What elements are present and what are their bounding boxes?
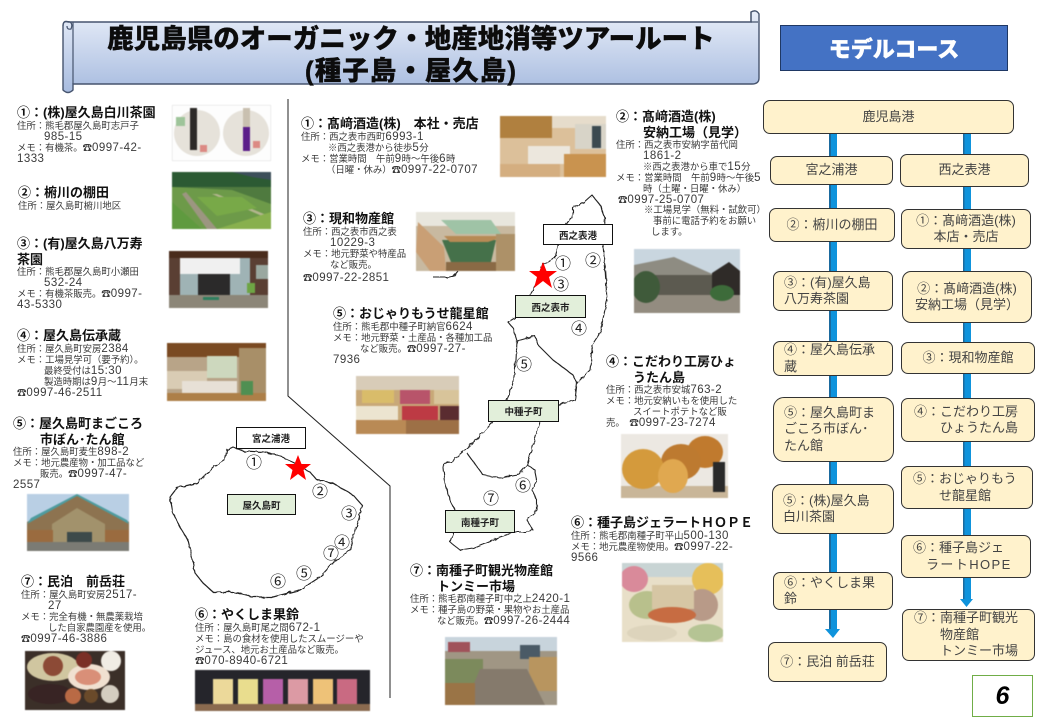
spot: やくしま果鈴: ☎070-8940-6721 <box>195 655 288 667</box>
step: トンミー市場: ⑦：南種子町観光 <box>914 610 1018 625</box>
spot: 種子島ジェラートHOPE: 住所：熊毛郡南種子町平山500-130 <box>571 530 729 542</box>
step: やくしま果鈴 <box>773 572 893 610</box>
map labels: Tanegashima: ① <box>555 250 571 274</box>
photo: tea packages <box>172 104 272 162</box>
photo: sweet potato pastries <box>620 434 728 498</box>
step: 白川茶園: ⑤：(株)屋久島 <box>783 492 870 508</box>
spot: 現和物産館: ③：現和物産館 <box>303 211 394 226</box>
spot: 種子島ジェラートHOPE <box>571 515 753 564</box>
spot: 椨川の棚田: ②：椨川の棚田 <box>18 185 109 200</box>
map labels: Yakushima: ⑤ <box>296 560 312 584</box>
step: まごころ市: ⑤：屋久島町ま <box>784 405 875 420</box>
map labels: Yakushima: ① <box>246 449 262 473</box>
step: 髙﨑酒造 安納工場: ②：髙﨑酒造(株) <box>917 280 1017 296</box>
course right column <box>900 154 1035 661</box>
spot: こだわり工房ひょうたん島 <box>606 354 737 429</box>
map labels: Tanegashima: 西之表港 <box>559 230 597 242</box>
step: ジェラートHOPE <box>901 535 1031 578</box>
step: 八万寿茶園: 八万寿茶園 <box>784 291 849 306</box>
spot: 屋久島白川茶園: 985-15 <box>44 131 83 143</box>
map labels: Tanegashima: ⑦ <box>483 485 499 509</box>
photo: terraced fields <box>171 171 272 230</box>
spot: 髙﨑酒造 安納工場: 1861-2 <box>643 150 682 162</box>
photo: gelato poster <box>621 562 724 643</box>
spot: 屋久島八万寿茶園: 532-24 <box>44 277 83 289</box>
title banner scroll <box>62 10 760 94</box>
step: 白川茶園: 白川茶園 <box>783 509 835 524</box>
course start: 鹿児島港: 鹿児島港 <box>862 109 914 124</box>
spot: こだわり工房ひょうたん島: うたん島 <box>633 370 685 385</box>
step: 屋久島伝承蔵: ④：屋久島伝承 <box>784 342 875 357</box>
map labels: Tanegashima <box>445 224 613 533</box>
spot: やくしま果鈴: メモ：島の食材を使用したスムージーや <box>195 633 364 644</box>
spot: 髙﨑酒造 本社・売店: ※西之表港から徒歩5分 <box>328 142 429 154</box>
map labels: Yakushima: ② <box>312 478 328 502</box>
step: 民泊 前岳荘: ⑦：民泊 前岳荘 <box>780 654 875 669</box>
spot: 民泊 前岳荘: ⑦：民泊 前岳荘 <box>21 574 125 589</box>
spot: まごころ市ぼん・たん館: メモ：地元農産物・加工品など 2557 <box>13 457 144 491</box>
step: 髙﨑酒造 本店 <box>901 209 1031 249</box>
step: 屋久島伝承蔵: 蔵 <box>784 358 797 374</box>
spot: まごころ市ぼん・たん館 <box>13 416 144 491</box>
map labels: Tanegashima: ⑤ <box>516 351 532 375</box>
spot: 髙﨑酒造 安納工場: します。 <box>651 226 688 237</box>
spot: 髙﨑酒造 本社・売店: ①：髙﨑酒造(株) 本社・売店 <box>301 116 479 131</box>
page number: 6 <box>996 682 1009 710</box>
spot: まごころ市ぼん・たん館: 住所：屋久島町麦生898-2 <box>13 446 129 458</box>
map labels: Tanegashima: ② <box>585 247 601 271</box>
photo: souvenir shelves <box>355 376 460 435</box>
title banner scroll: (種子島・屋久島) <box>305 56 517 86</box>
photo: market interior <box>444 636 558 706</box>
photo: food plates <box>24 650 126 711</box>
step: 髙﨑酒造 安納工場: 安納工場（見学） <box>915 297 1019 312</box>
step: 屋久島伝承蔵 <box>773 341 893 376</box>
step: 西之表港 <box>900 154 1029 187</box>
spot: やくしま果鈴: 住所：屋久島町尾之間672-1 <box>195 622 320 634</box>
photo: smoothies <box>194 669 371 712</box>
spot: 屋久島伝承蔵: メモ：工場見学可（要予約）。 ☎0997-46-2511 <box>17 354 144 399</box>
spot: やくしま果鈴: ⑥：やくしま果鈴 <box>195 607 299 622</box>
step: まごころ市: たん館 <box>784 438 823 453</box>
spot: 屋久島八万寿茶園: ③：(有)屋久島八万寿 <box>17 236 143 251</box>
photo: brewery shop interior <box>166 342 267 402</box>
spot: 現和物産館: ☎0997-22-2851 <box>303 272 389 284</box>
photo: produce shop <box>415 212 516 272</box>
map labels: Yakushima: ③ <box>341 500 357 524</box>
spot: 髙﨑酒造 安納工場: ※工場見学（無料・試飲可） <box>644 204 766 215</box>
model course heading <box>780 25 1008 71</box>
spot: 屋久島伝承蔵: 最終受付は15:30 <box>44 365 122 377</box>
icon: red star Tanegashima <box>529 262 557 288</box>
step: 現和物産館 <box>901 342 1035 374</box>
spot: トンミー市場: メモ：種子島の野菜・果物やお土産品 <box>410 604 569 615</box>
step: 椨川の棚田 <box>769 208 895 242</box>
spot: 髙﨑酒造 安納工場 <box>616 109 766 237</box>
spot: トンミー市場: など販売。☎0997-26-2444 <box>437 615 570 627</box>
step: 宮之浦港: 宮之浦港 <box>805 162 858 177</box>
spot: やくしま果鈴 <box>195 607 364 667</box>
spot: 髙﨑酒造 本社・売店: （日曜・休み）☎0997-22-0707 <box>326 164 478 176</box>
spot: 現和物産館: など販売。 <box>330 259 377 270</box>
spot: まごころ市ぼん・たん館: 販売。☎0997-47- <box>40 468 127 480</box>
spot: 屋久島白川茶園 <box>17 105 156 165</box>
step: 髙﨑酒造 安納工場 <box>902 271 1032 323</box>
spot: 髙﨑酒造 本社・売店 <box>301 116 479 176</box>
spot: おじゃりもうせ龍星館: メモ：地元野菜・土産品・各種加工品 7936 <box>333 332 492 366</box>
map labels: Yakushima: ④ <box>334 529 350 553</box>
map labels: Tanegashima: 中種子町 <box>504 407 542 418</box>
flow connectors and arrows <box>825 134 973 638</box>
step: まごころ市 <box>773 397 894 462</box>
spot: こだわり工房ひょうたん島: メモ：地元安納いもを使用した 売。 ☎0997-23-7274 <box>606 395 737 429</box>
step: 龍星館 <box>901 466 1033 509</box>
spot: おじゃりもうせ龍星館 <box>333 306 492 366</box>
spot: 種子島ジェラートHOPE: メモ：地元農産物使用。☎0997-22- <box>571 541 733 553</box>
map labels: Tanegashima: ③ <box>553 271 569 295</box>
spot: 屋久島八万寿茶園: 43-5330 <box>17 299 62 311</box>
spot: 髙﨑酒造 安納工場: 事前に電話予約をお願い <box>653 215 756 226</box>
step: トンミー市場: トンミー市場 <box>940 643 1018 658</box>
spot: 種子島ジェラートHOPE: 9566 <box>571 552 598 564</box>
spot: 髙﨑酒造 安納工場: 安納工場（見学） <box>643 125 747 140</box>
step: ジェラートHOPE: ラートHOPE <box>926 556 1012 572</box>
map labels: Yakushima <box>227 427 357 592</box>
photo: brewery shop <box>499 115 607 178</box>
spot: 椨川の棚田: 住所：屋久島町椨川地区 <box>18 200 121 211</box>
spot: 椨川の棚田 <box>18 185 121 211</box>
title banner scroll: 鹿児島県のオーガニック・地産地消等ツアールート <box>107 24 715 54</box>
spot: 屋久島伝承蔵: 製造時期は9月～11月末 <box>44 376 148 388</box>
map labels: Yakushima: 宮之浦港 <box>252 434 290 445</box>
spot: 屋久島白川茶園: ①：(株)屋久島白川茶園 <box>17 105 156 120</box>
step: 現和物産館: ③：現和物産館 <box>922 350 1014 365</box>
step: トンミー市場: 物産館 <box>940 627 979 642</box>
step: 髙﨑酒造 本店: ①：髙﨑酒造(株) <box>916 212 1016 228</box>
spot: 髙﨑酒造 安納工場: ☎0997-25-0707 <box>618 194 704 206</box>
step: ひょうたん島: ④：こだわり工房 <box>914 404 1018 418</box>
step: 龍星館: せ龍星館 <box>939 488 991 502</box>
step: 八万寿茶園: ③：(有)屋久島 <box>784 274 871 290</box>
spot: 現和物産館: 住所：西之表市西之表 メモ：地元野菜や特産品 <box>303 226 406 259</box>
map labels: Tanegashima: 西之表市 <box>531 302 570 314</box>
spot: 髙﨑酒造 安納工場: ※西之表港から車で15分 <box>643 161 750 173</box>
spot: こだわり工房ひょうたん島: ④：こだわり工房ひょ <box>606 354 736 369</box>
step: 椨川の棚田: ②：椨川の棚田 <box>786 217 878 232</box>
spot: 髙﨑酒造 本社・売店: 住所：西之表市西町6993-1 メモ：営業時間 午前9時～午後6時 <box>301 131 455 165</box>
spot: こだわり工房ひょうたん島: 住所：西之表市安城763-2 <box>606 384 722 396</box>
step: ジェラートHOPE: ⑥：種子島ジェ <box>913 540 1004 555</box>
spot: 屋久島伝承蔵 <box>17 328 148 399</box>
spot: まごころ市ぼん・たん館: ⑤：屋久島町まごころ <box>13 416 143 431</box>
map labels: Yakushima: ⑦ <box>323 540 339 564</box>
spot: 民泊 前岳荘: 27 <box>48 600 62 612</box>
spot: 屋久島白川茶園: 住所：熊毛郡屋久島町志戸子 メモ：有機茶。☎0997-42- <box>17 120 142 154</box>
map labels: Yakushima: 屋久島町 <box>242 500 280 512</box>
photo: brewery factory <box>633 248 741 314</box>
spot: トンミー市場: ⑦：南種子町観光物産館 <box>410 563 553 578</box>
map labels: Tanegashima: ⑥ <box>515 472 531 496</box>
photo: tea shop storefront <box>168 250 269 309</box>
spot: やくしま果鈴: ジュース、地元お土産品など販売。 <box>195 644 344 655</box>
spot: 屋久島八万寿茶園: 茶園 <box>17 252 43 267</box>
spot: 種子島ジェラートHOPE: ⑥：種子島ジェラートＨＯＰＥ <box>571 515 753 530</box>
spot: 民泊 前岳荘: した自家農園産を使用。 <box>48 622 151 633</box>
step: ひょうたん島 <box>901 398 1035 442</box>
spot: 髙﨑酒造 安納工場: 住所：西之表市安納字苗代岡 メモ：営業時間 午前9時～午後5 <box>616 139 761 184</box>
page number <box>972 675 1033 717</box>
map labels: Yakushima: ⑥ <box>270 568 286 592</box>
step: トンミー市場 <box>902 609 1035 661</box>
spot: 髙﨑酒造 安納工場: ②：髙﨑酒造(株) <box>616 109 716 124</box>
step: 龍星館: ⑤：おじゃりもう <box>913 471 1017 486</box>
spot: おじゃりもうせ龍星館: など販売。☎0997-27- <box>360 343 466 355</box>
spot: おじゃりもうせ龍星館: ⑤：おじゃりもうせ龍星館 <box>333 306 489 321</box>
spot: 現和物産館 <box>303 211 406 284</box>
course start: 鹿児島港 <box>763 100 1014 134</box>
map labels: Tanegashima: ④ <box>571 315 587 339</box>
spot: おじゃりもうせ龍星館: 住所：熊毛郡中種子町納官6624 <box>333 321 473 333</box>
step: 西之表港: 西之表港 <box>938 162 990 177</box>
map: Yakushima <box>169 446 364 599</box>
step: 白川茶園 <box>772 484 894 534</box>
spot: トンミー市場: トンミー市場 <box>437 579 515 594</box>
step: ひょうたん島: ひょうたん島 <box>940 420 1018 435</box>
spot: 屋久島伝承蔵: 住所：屋久島町安房2384 <box>17 343 129 355</box>
spot: 屋久島八万寿茶園: 住所：熊毛郡屋久島町小瀬田 メモ：有機茶販売。☎0997- <box>17 266 142 300</box>
spot: 屋久島白川茶園: 1333 <box>17 153 44 165</box>
spot: 屋久島伝承蔵: ④：屋久島伝承蔵 <box>17 328 121 343</box>
map: Tanegashima <box>433 194 608 551</box>
spot: 民泊 前岳荘: 住所：屋久島町安房2517- メモ：完全有機・無農薬栽培 ☎0997-46-3886 <box>21 589 143 645</box>
icon: red star Yakushima <box>285 455 311 480</box>
map labels: Tanegashima: 南種子町 <box>461 518 499 528</box>
spot: トンミー市場: 住所：熊毛郡南種子町中之上2420-1 <box>410 593 570 605</box>
spot: まごころ市ぼん・たん館: 市ぼん･たん館 <box>40 432 125 447</box>
spot: 屋久島八万寿茶園 <box>17 236 143 311</box>
photo: market hall building <box>26 493 130 552</box>
step: 髙﨑酒造 本店: 本店・売店 <box>933 229 998 244</box>
course left column <box>768 156 895 682</box>
step: まごころ市: ごころ市ぼん･ <box>784 421 869 436</box>
spot: 現和物産館: 10229-3 <box>330 237 375 249</box>
step: やくしま果鈴: ⑥：やくしま果 <box>784 574 875 590</box>
step: やくしま果鈴: 鈴 <box>784 591 797 606</box>
spot: こだわり工房ひょうたん島: スイートポテトなど販 <box>633 406 727 417</box>
step: 宮之浦港 <box>770 156 893 185</box>
step: 八万寿茶園 <box>773 271 893 311</box>
spot: 髙﨑酒造 安納工場: 時（土曜・日曜・休み） <box>643 183 746 194</box>
model course heading: モデルコース <box>829 37 959 62</box>
step: 民泊 前岳荘 <box>768 642 887 682</box>
spot: トンミー市場 <box>410 563 570 627</box>
